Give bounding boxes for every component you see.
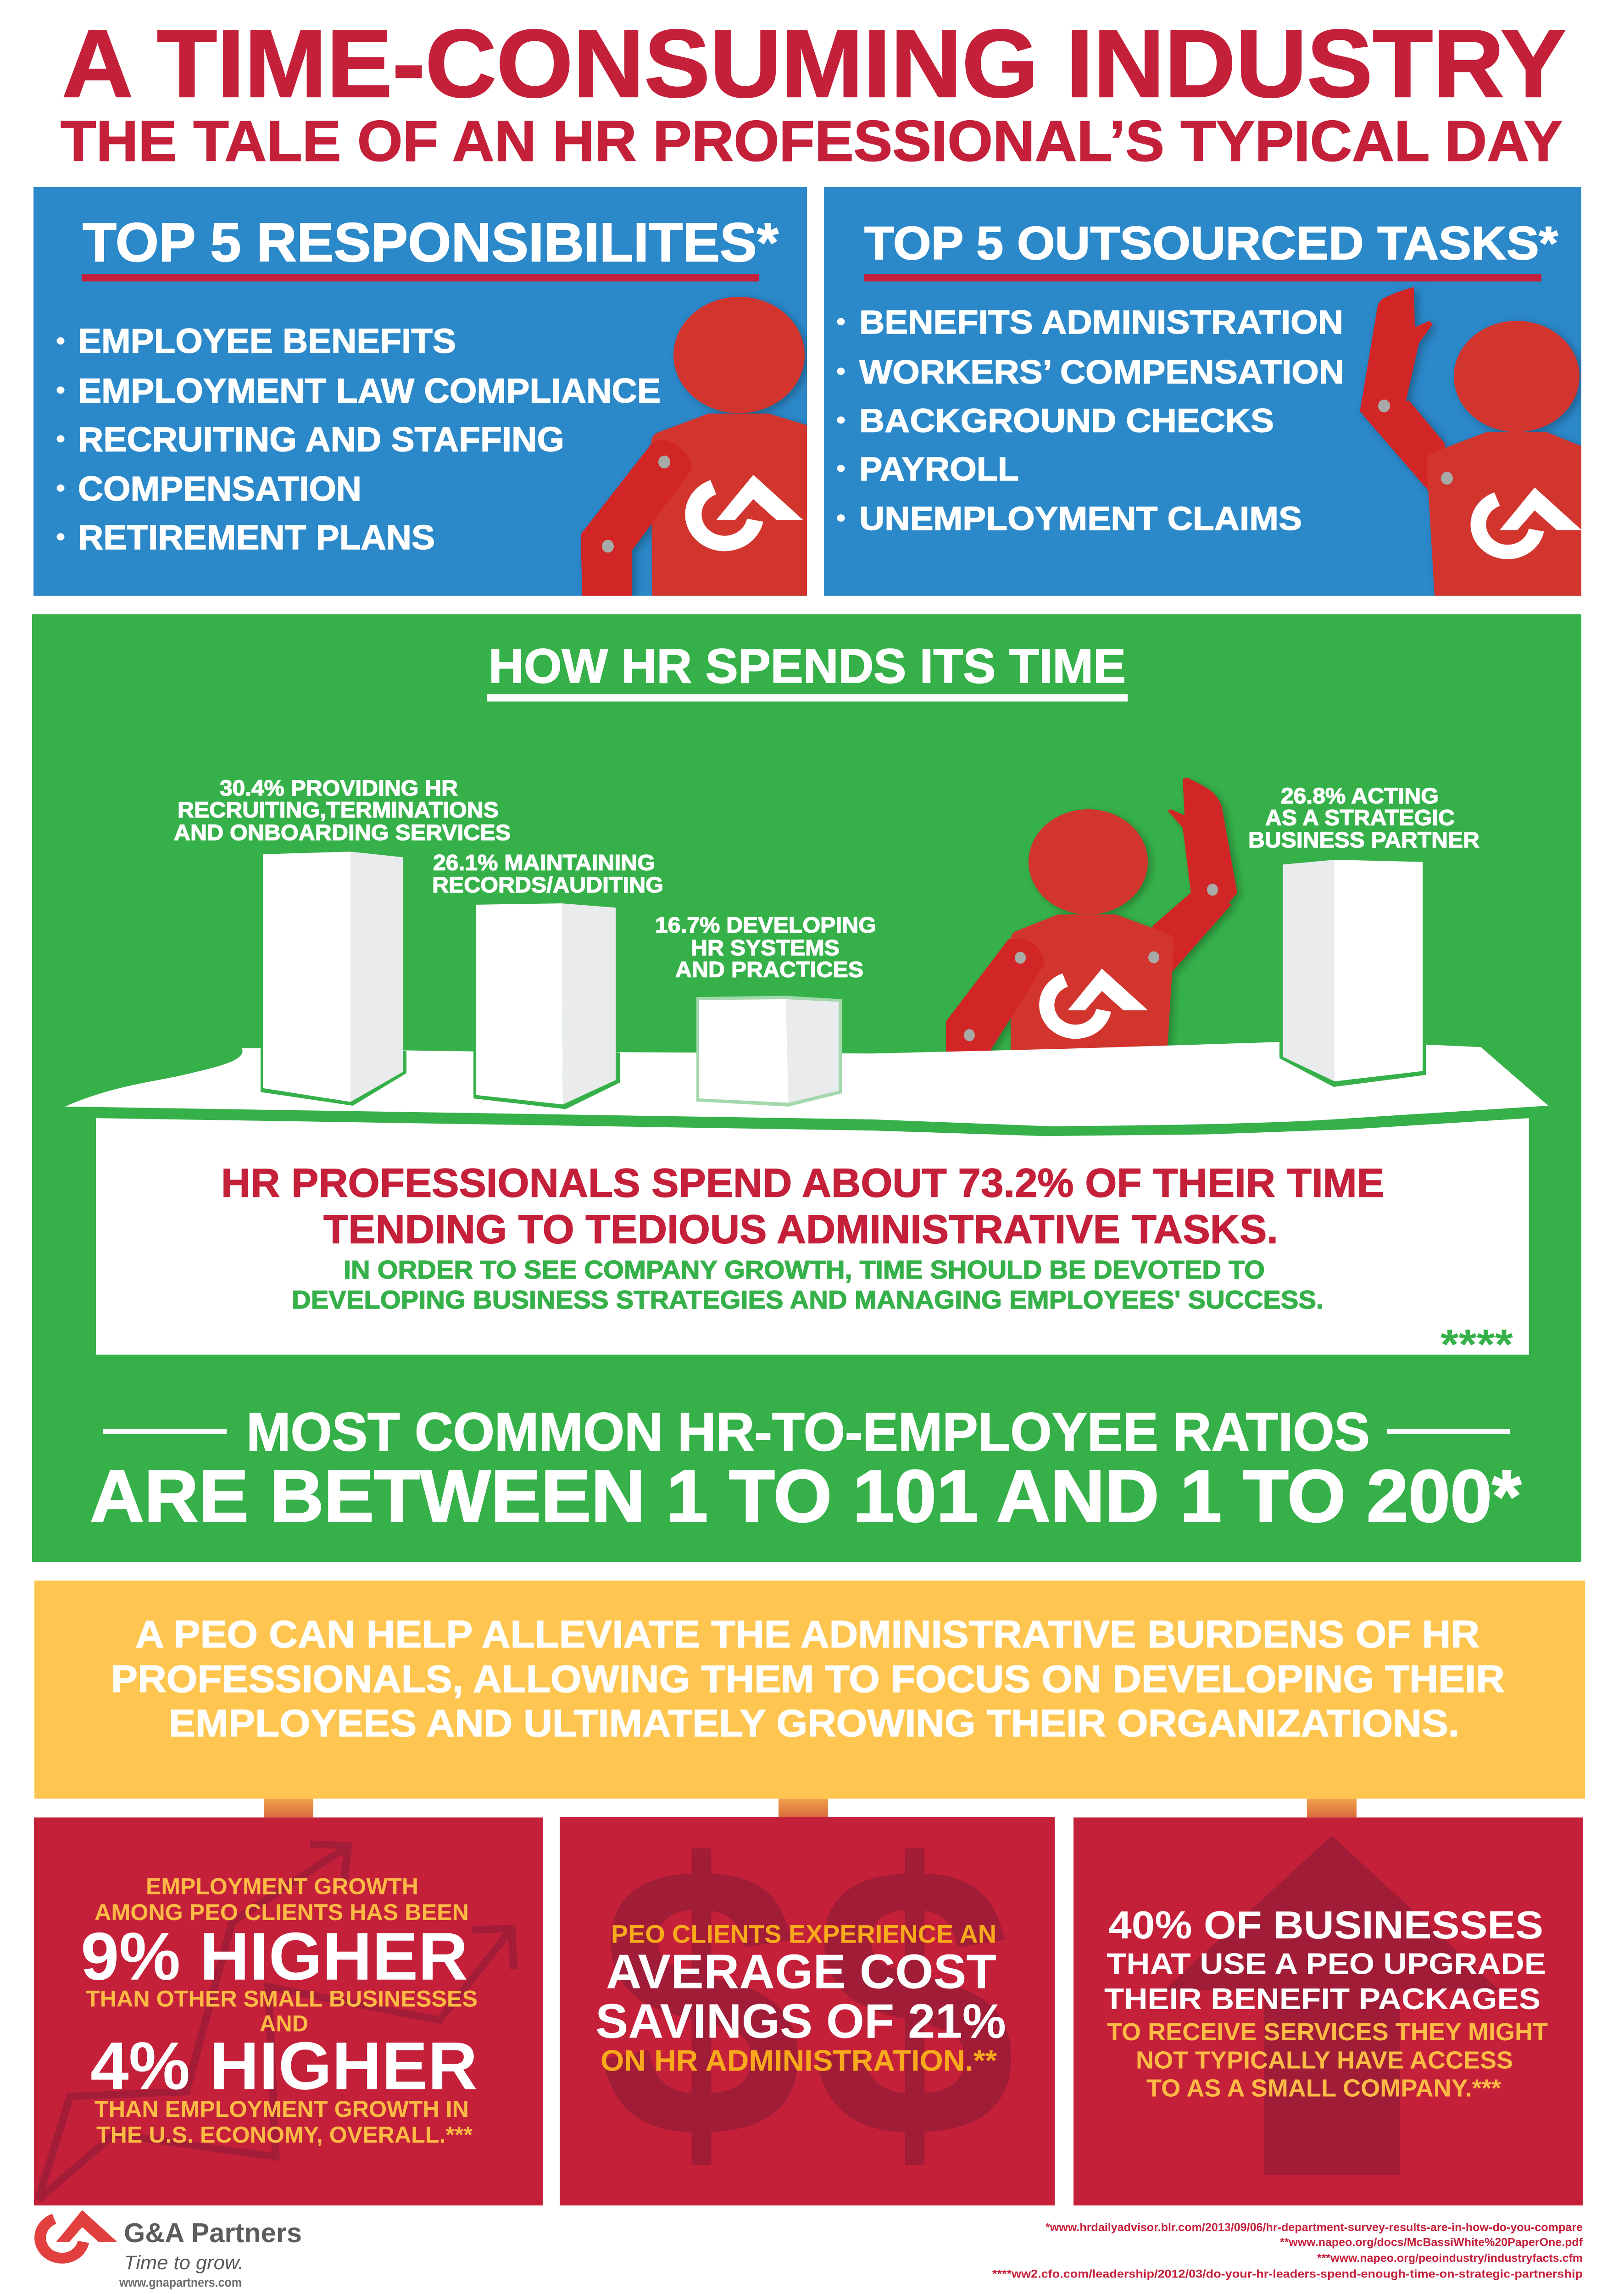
white callout box [96,1118,1529,1355]
stat text: employment growth: 9% HIGHER [81,1919,468,1994]
label: 26.8% strategic partner: AS A STRATEGIC [1265,805,1455,830]
stat text: cost savings: PEO CLIENTS EXPERIENCE AN [611,1920,996,1949]
icon: dollar signs [598,1785,1016,2218]
ratio headline [90,1402,1521,1537]
heading underline [82,274,759,281]
label: 30.4% providing HR recruiting: RECRUITING,TERMINATIONS [178,797,499,822]
stat text: employment growth: EMPLOYMENT GROWTH [146,1874,418,1899]
heading: top 5 responsibilities: TOP 5 RESPONSIBILITES* [83,212,779,273]
label: 26.8% strategic partner: 26.8% ACTING [1281,783,1439,808]
icon: growth arrows [38,1844,514,2199]
stat text: benefit upgrades: THEIR BENEFIT PACKAGES [1104,1982,1541,2016]
subtitle: THE TALE OF AN HR PROFESSIONAL’S TYPICAL DAY [61,110,1563,173]
stat text: benefit upgrades: TO AS A SMALL COMPANY.*** [1146,2074,1501,2102]
logo mark on chest [693,475,803,543]
label: 16.7% developing HR systems: AND PRACTICES [675,957,863,982]
stat text: employment growth: 4% HIGHER [90,2028,478,2104]
panel: PEO statement [34,1581,1585,1798]
label: 26.1% maintaining records: RECORDS/AUDITING [432,872,663,897]
stat text: employment growth: THAN EMPLOYMENT GROWTH IN [95,2097,469,2122]
ratio headline: MOST COMMON HR-TO-EMPLOYEE RATIOS [246,1402,1370,1462]
stat text: employment growth: THAN OTHER SMALL BUSINESSES [86,1986,478,2012]
footnote sources [992,2221,1583,2280]
tagline: Time to grow. [124,2252,244,2274]
logo mark on chest [1478,487,1582,552]
bar: 16.7% [696,996,842,1107]
title: A TIME-CONSUMING INDUSTRY [62,10,1566,117]
label: 16.7% developing HR systems: HR SYSTEMS [691,935,840,960]
responsibilities list: COMPENSATION [78,469,362,508]
label: 16.7% developing HR systems: 16.7% DEVELOPING [655,912,876,937]
label: 30.4% providing HR recruiting: 30.4% PROVIDING HR [220,775,458,801]
logo mark on chest [1047,969,1148,1032]
stat text: cost savings: SAVINGS OF 21% [595,1994,1006,2049]
bar: 30.4% [261,852,406,1106]
responsibilities list: RETIREMENT PLANS [78,518,435,557]
panel: cost savings [560,1785,1055,2218]
label: 26.1% maintaining records [432,850,663,897]
callout text: 73.2% of time: TENDING TO TEDIOUS ADMINISTRATIVE TASKS. [323,1207,1278,1252]
responsibilities list: EMPLOYEE BENEFITS [78,322,456,361]
stat text: benefit upgrades: NOT TYPICALLY HAVE ACCESS [1136,2046,1513,2074]
company name: G&A Partners [124,2218,302,2249]
stat text: employment growth: THE U.S. ECONOMY, OVERALL.*** [96,2122,473,2148]
footnote sources: ***www.napeo.org/peoindustry/industryfacts.cfm [1317,2251,1583,2265]
stat text: benefit upgrades: THAT USE A PEO UPGRADE [1107,1948,1546,1981]
stat text: benefit upgrades: TO RECEIVE SERVICES THEY MIGHT [1107,2018,1548,2046]
callout subtext: DEVELOPING BUSINESS STRATEGIES AND MANAGING EMPLOYEES' SUCCESS. [292,1286,1324,1314]
label: 26.8% strategic partner: BUSINESS PARTNER [1248,827,1479,852]
heading underline [487,694,1128,702]
outsourced tasks list: BENEFITS ADMINISTRATION [859,304,1343,341]
stat text: benefit upgrades [1104,1903,1548,2102]
footnote sources: ****ww2.cfo.com/leadership/2012/03/do-your-hr-leaders-spend-enough-time-on-strategic-partnership [992,2267,1583,2280]
heading underline [864,274,1541,281]
panel: top 5 outsourced tasks [824,187,1582,596]
responsibilities list: RECRUITING AND STAFFING [78,420,564,459]
callout text: 73.2% of time [221,1161,1384,1252]
logo: G&A Partners [40,2210,302,2290]
callout text: 73.2% of time: HR PROFESSIONALS SPEND ABOUT 73.2% OF THEIR TIME [221,1161,1384,1206]
logo mark [40,2210,117,2258]
panel: benefit upgrades [1073,1817,1583,2205]
desk surface [65,1042,1548,1126]
icon: dollar signs: $ [598,1785,803,2218]
label: 30.4% providing HR recruiting [174,775,511,845]
callout subtext [292,1256,1324,1314]
icon: red mannequin behind desk [946,778,1237,1061]
outsourced tasks list: PAYROLL [859,450,1019,487]
label: 30.4% providing HR recruiting: AND ONBOARDING SERVICES [174,820,511,845]
connector tabs [264,1798,1357,1817]
stat text: cost savings: ON HR ADMINISTRATION.** [601,2044,997,2077]
label: 16.7% developing HR systems [655,912,876,982]
icon: red mannequin figure waving [1360,287,1582,596]
source marker: **** [1440,1320,1513,1368]
stat text: benefit upgrades: 40% OF BUSINESSES [1108,1903,1543,1947]
icon: up arrow [1164,1836,1500,2175]
icon: dollar signs: $ [812,1785,1016,2218]
label: 26.1% maintaining records: 26.1% MAINTAINING [433,850,655,875]
outsourced tasks list [837,304,1344,537]
PEO statement text: EMPLOYEES AND ULTIMATELY GROWING THEIR ORGANIZATIONS. [169,1702,1459,1745]
responsibilities list: EMPLOYMENT LAW COMPLIANCE [78,371,661,410]
outsourced tasks list: BACKGROUND CHECKS [859,402,1274,439]
stat text: cost savings: AVERAGE COST [606,1945,996,1999]
panel: how HR spends its time [32,614,1581,1562]
panel: top 5 responsibilities [33,187,807,596]
footnote sources: **www.napeo.org/docs/McBassiWhite%20PaperOne.pdf [1280,2235,1583,2249]
outsourced tasks list: UNEMPLOYMENT CLAIMS [859,500,1302,537]
footnote sources: *www.hrdailyadvisor.blr.com/2013/09/06/hr-department-survey-results-are-in-how-do-you-compare [1046,2221,1583,2234]
PEO statement text [111,1613,1505,1745]
stat text: employment growth: AND [260,2011,308,2037]
heading: how HR spends its time: HOW HR SPENDS ITS TIME [489,639,1126,693]
stat text: cost savings [595,1920,1006,2077]
PEO statement text: A PEO CAN HELP ALLEVIATE THE ADMINISTRATIVE BURDENS OF HR [135,1613,1479,1656]
bar: 26.8% [1279,860,1426,1087]
callout subtext: IN ORDER TO SEE COMPANY GROWTH, TIME SHOULD BE DEVOTED TO [344,1256,1265,1284]
outsourced tasks list: WORKERS’ COMPENSATION [859,353,1344,390]
responsibilities list [57,322,661,557]
website: www.gnapartners.com [119,2276,242,2290]
label: 26.8% strategic partner [1248,783,1479,852]
panel: employment growth [34,1817,543,2205]
stat text: employment growth: AMONG PEO CLIENTS HAS BEEN [95,1900,469,1926]
bar: 26.1% [473,903,620,1109]
icon: red mannequin figure [581,297,807,596]
heading: top 5 outsourced tasks: TOP 5 OUTSOURCED TASKS* [864,217,1558,269]
ratio headline: ARE BETWEEN 1 TO 101 AND 1 TO 200* [90,1455,1521,1537]
stat text: employment growth [81,1874,478,2148]
PEO statement text: PROFESSIONALS, ALLOWING THEM TO FOCUS ON DEVELOPING THEIR [111,1658,1505,1701]
